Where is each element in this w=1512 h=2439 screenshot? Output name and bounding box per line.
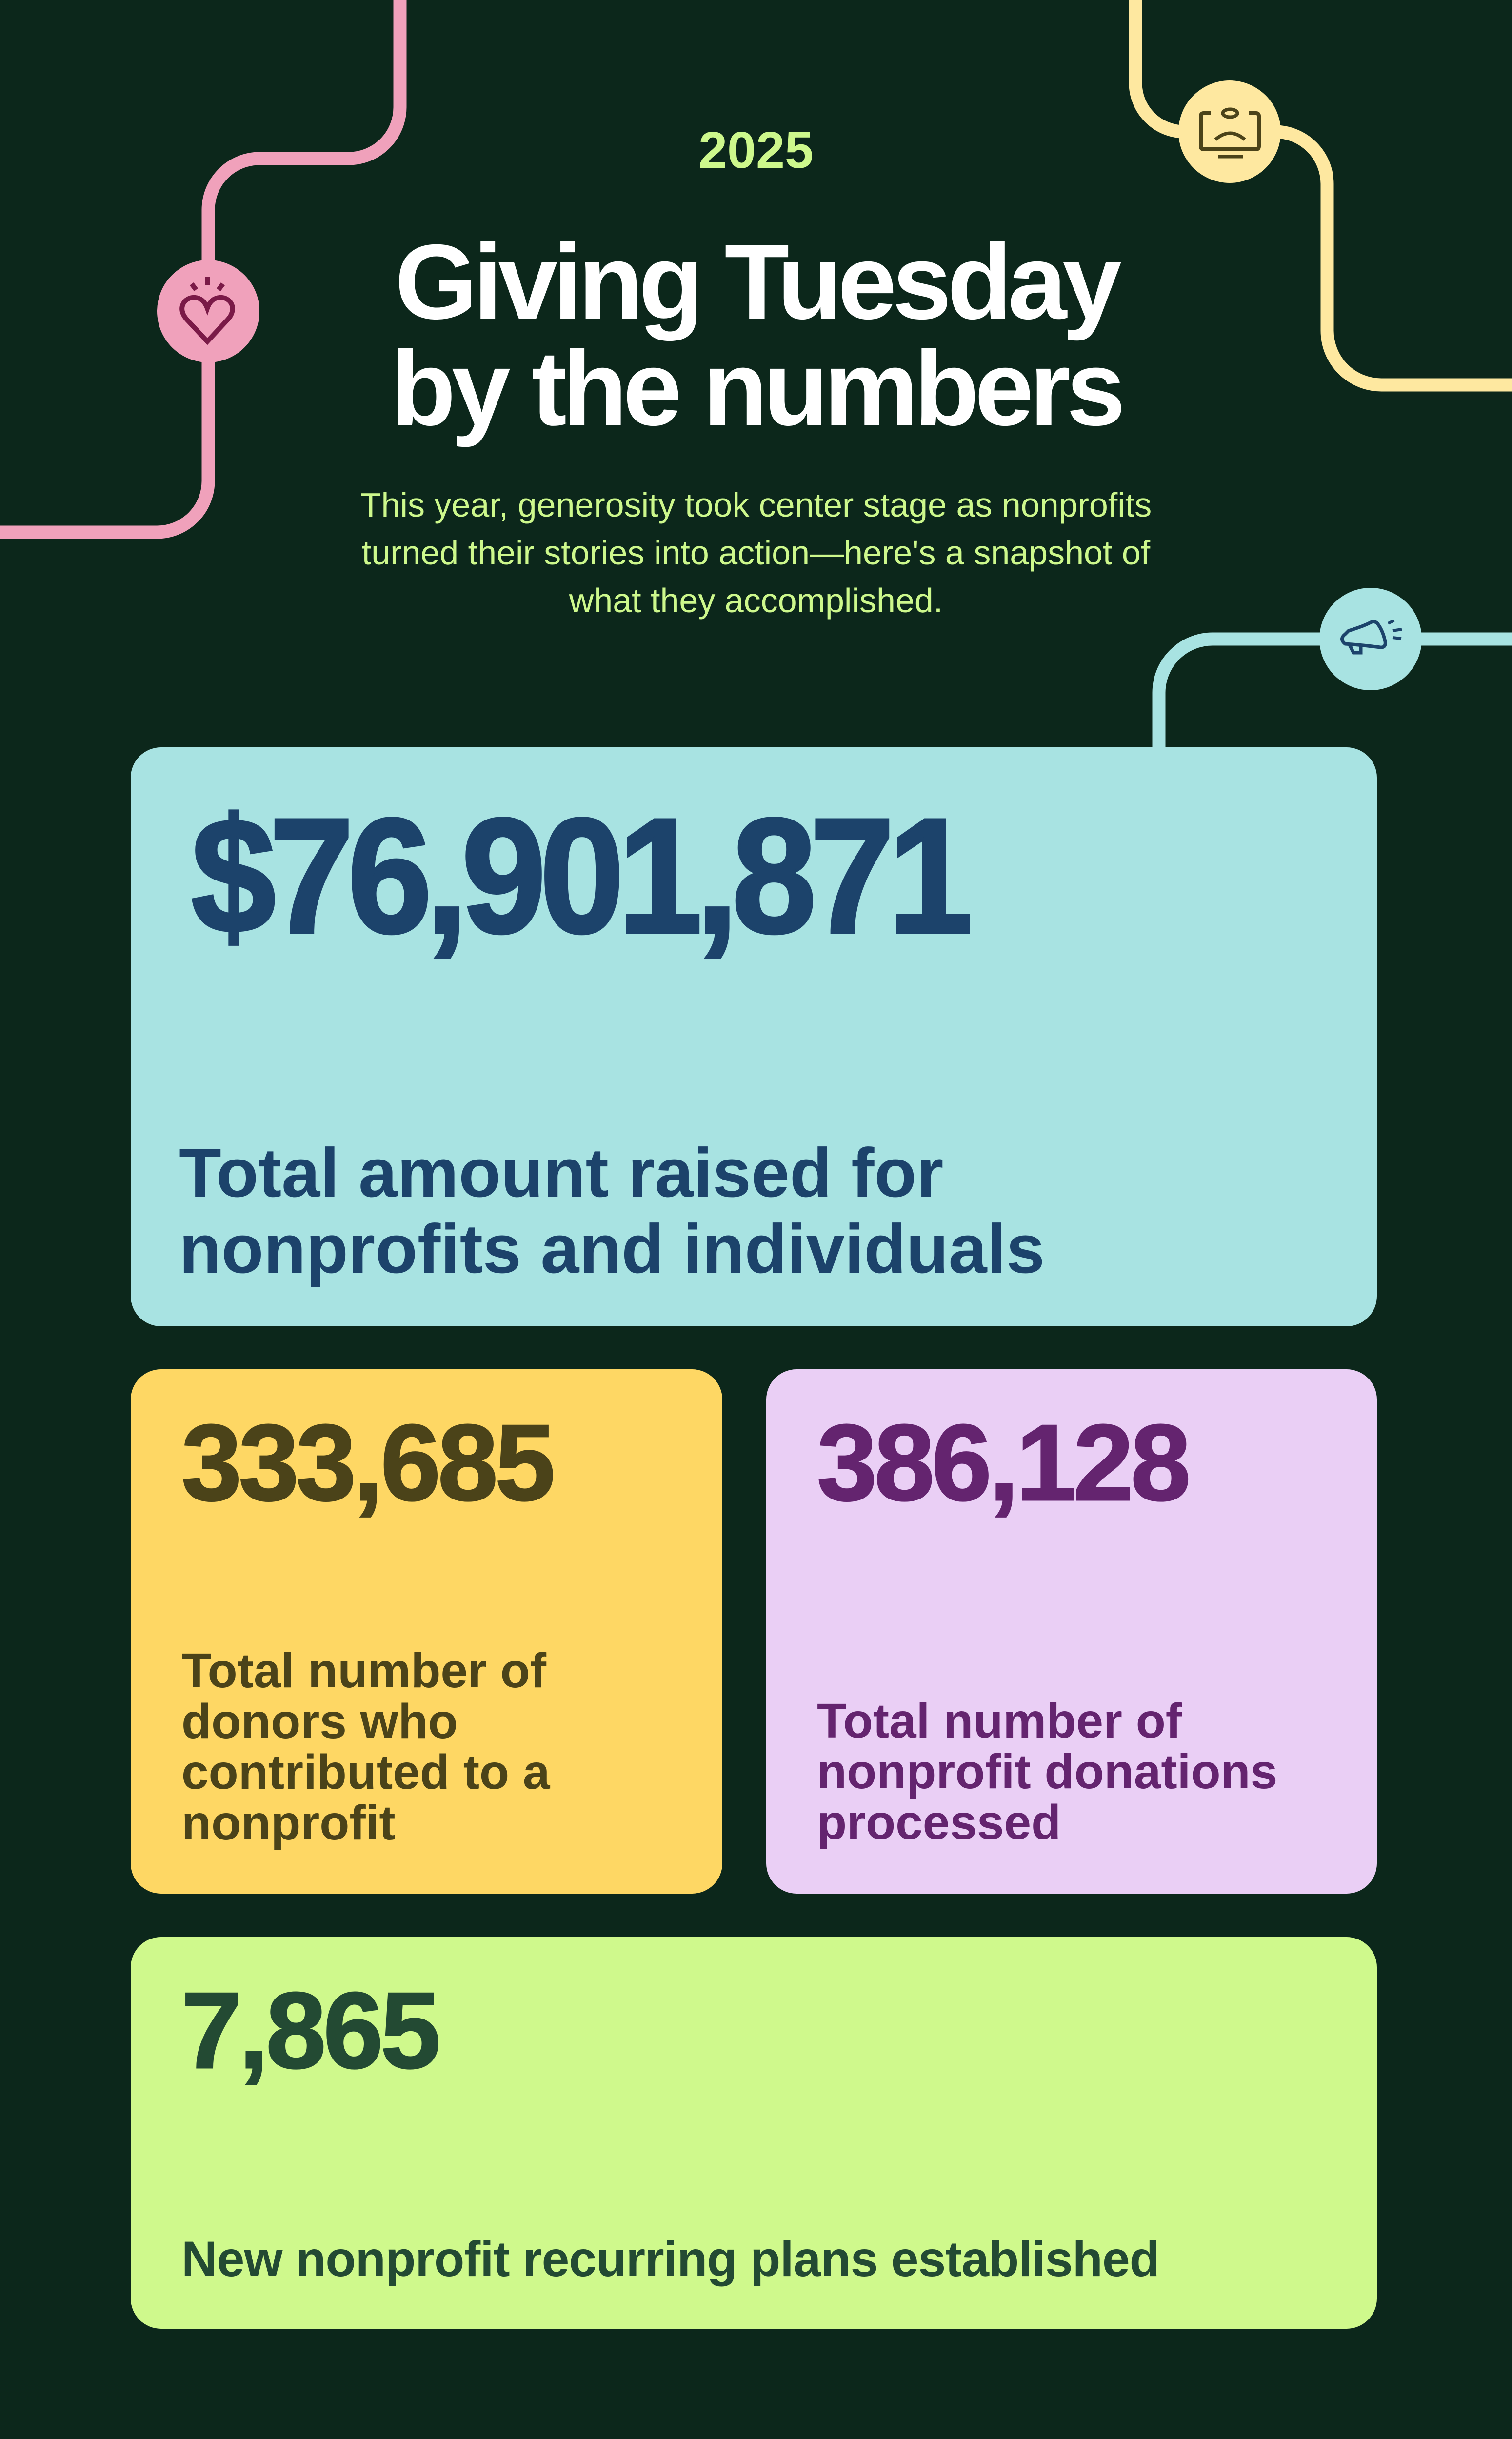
label: Total number of [181, 1643, 546, 1698]
year: 2025 [698, 121, 814, 179]
panel: recurring plans [131, 1937, 1377, 2329]
decorative connector lines with icons [0, 0, 1512, 747]
subtitle [360, 486, 1152, 620]
label: nonprofit [181, 1796, 396, 1850]
icon: heart [157, 260, 259, 362]
label: nonprofit donations [817, 1744, 1277, 1799]
label [817, 1694, 1277, 1850]
panel: donations [766, 1369, 1377, 1894]
icon: megaphone [1319, 588, 1422, 690]
label: contributed to a [181, 1745, 550, 1799]
label: nonprofits and individuals [179, 1210, 1045, 1288]
label: New nonprofit recurring plans established [181, 2231, 1159, 2287]
label: donors who [181, 1694, 458, 1749]
title [391, 223, 1121, 448]
title: Giving Tuesday [395, 223, 1117, 341]
number: 7,865 [181, 1970, 438, 2091]
label: Total number of [817, 1694, 1182, 1748]
number: 386,128 [817, 1402, 1188, 1523]
panel: total raised [131, 747, 1377, 1326]
big number: $76,901,871 [191, 784, 966, 967]
number: 333,685 [181, 1402, 552, 1523]
label: Total amount raised for [179, 1134, 943, 1212]
subtitle: This year, generosity took center stage as nonprofits [360, 486, 1152, 524]
icon: person on screen [1178, 80, 1281, 183]
label [179, 1134, 1045, 1288]
label: processed [817, 1795, 1061, 1850]
panel: donors [131, 1369, 722, 1894]
label [181, 1643, 550, 1850]
title: by the numbers [391, 329, 1121, 448]
subtitle: what they accomplished. [569, 581, 943, 620]
subtitle: turned their stories into action—here's a snapshot of [362, 534, 1150, 572]
